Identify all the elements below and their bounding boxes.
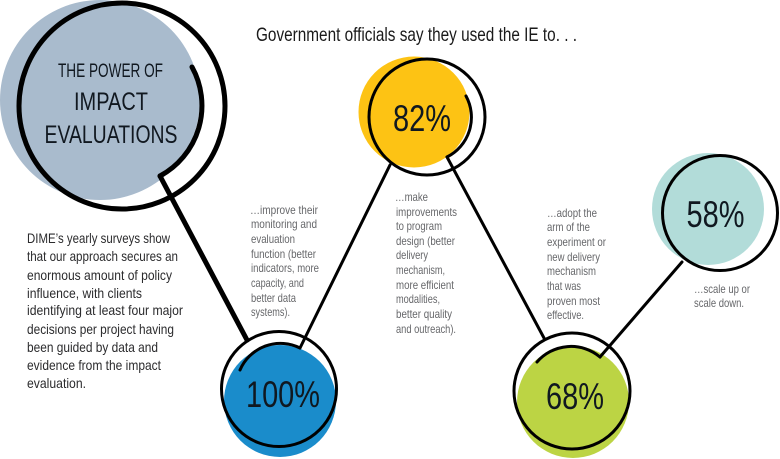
caption: program design: and outreach). (396, 322, 456, 336)
title text: EVALUATIONS (44, 121, 178, 149)
intro text block: evidence from the impact (27, 357, 161, 373)
caption: improve monitoring: better data (251, 291, 296, 305)
caption: improve monitoring: function (better (251, 247, 316, 261)
82% value: 82% (393, 98, 451, 139)
caption: program design: mechanism, (396, 263, 445, 277)
68% ring (514, 333, 630, 449)
panel: 58% circle (652, 153, 778, 270)
82% inner arc (447, 96, 471, 157)
connector: 82% to 68% (447, 157, 544, 338)
panel: title circle (0, 0, 225, 209)
caption: adopt the arm: proven most (547, 294, 601, 308)
82% fill (358, 56, 470, 168)
caption: program design: better quality (396, 307, 452, 321)
connector: 100% to 82% (300, 165, 390, 348)
connector: 68% to 58% (600, 262, 682, 357)
caption: program design: …make (395, 190, 428, 204)
caption: program design: more efficient (396, 278, 455, 292)
heading: government officials: Government officials say they used the IE to. . . (256, 24, 577, 46)
100% ring (222, 332, 336, 446)
82% ring (369, 59, 485, 175)
58% ring (662, 156, 778, 270)
title text: THE POWER OF (58, 60, 163, 82)
caption: adopt the arm (547, 206, 606, 322)
caption: adopt the arm: new delivery (547, 250, 600, 264)
intro text block: that our approach secures an (27, 248, 178, 264)
intro text block (27, 230, 183, 391)
caption: adopt the arm: experiment or (547, 235, 606, 249)
title text (44, 60, 178, 149)
caption: scale up or down: scale down. (694, 296, 744, 310)
caption: program design: delivery (396, 248, 428, 262)
title circle inner arc (160, 67, 202, 176)
panel: 82% circle (358, 56, 485, 175)
100% value: 100% (246, 374, 320, 415)
58% fill (652, 153, 764, 265)
title circle fill (0, 0, 200, 200)
caption: improve monitoring (250, 203, 319, 319)
100% inner arc (240, 343, 300, 370)
title circle ring (19, 3, 225, 209)
intro text block: evaluation. (27, 375, 86, 391)
intro text block: DIME’s yearly surveys show (27, 230, 171, 246)
caption: improve monitoring: indicators, more (251, 261, 319, 275)
caption: adopt the arm: …adopt the (547, 206, 597, 220)
68% fill (517, 346, 629, 458)
intro text block: decisions per project having (27, 321, 174, 337)
caption: scale up or down: …scale up or (694, 282, 750, 296)
100% fill (224, 345, 336, 457)
connector: title to 100% (160, 176, 247, 340)
caption: program design: to program (396, 219, 442, 233)
caption: improve monitoring: capacity, and (251, 276, 304, 290)
caption: program design: modalities, (396, 292, 440, 306)
caption: adopt the arm: mechanism (547, 264, 596, 278)
caption: improve monitoring: …improve their (250, 203, 318, 217)
caption: improve monitoring: monitoring and (251, 217, 317, 231)
intro text block: influence, with clients (27, 285, 142, 301)
caption: adopt the arm: that was (547, 279, 581, 293)
68% value: 68% (546, 376, 604, 417)
caption: improve monitoring: systems). (251, 305, 290, 319)
intro text block: been guided by data and (27, 339, 158, 355)
caption: program design: improvements (396, 205, 457, 219)
title text: IMPACT (74, 88, 148, 116)
caption: adopt the arm: arm of the (547, 220, 590, 234)
caption: adopt the arm: effective. (547, 308, 584, 322)
caption: program design (395, 190, 457, 336)
panel: 100% circle (222, 332, 336, 457)
caption: scale up or down (694, 282, 750, 310)
68% inner arc (537, 346, 600, 362)
caption: improve monitoring: evaluation (251, 232, 295, 246)
58% value: 58% (686, 194, 744, 235)
panel: 68% circle (514, 333, 630, 458)
caption: program design: design (better (396, 234, 455, 248)
intro text block: identifying at least four major (27, 302, 183, 318)
intro text block: enormous amount of policy (27, 267, 172, 283)
